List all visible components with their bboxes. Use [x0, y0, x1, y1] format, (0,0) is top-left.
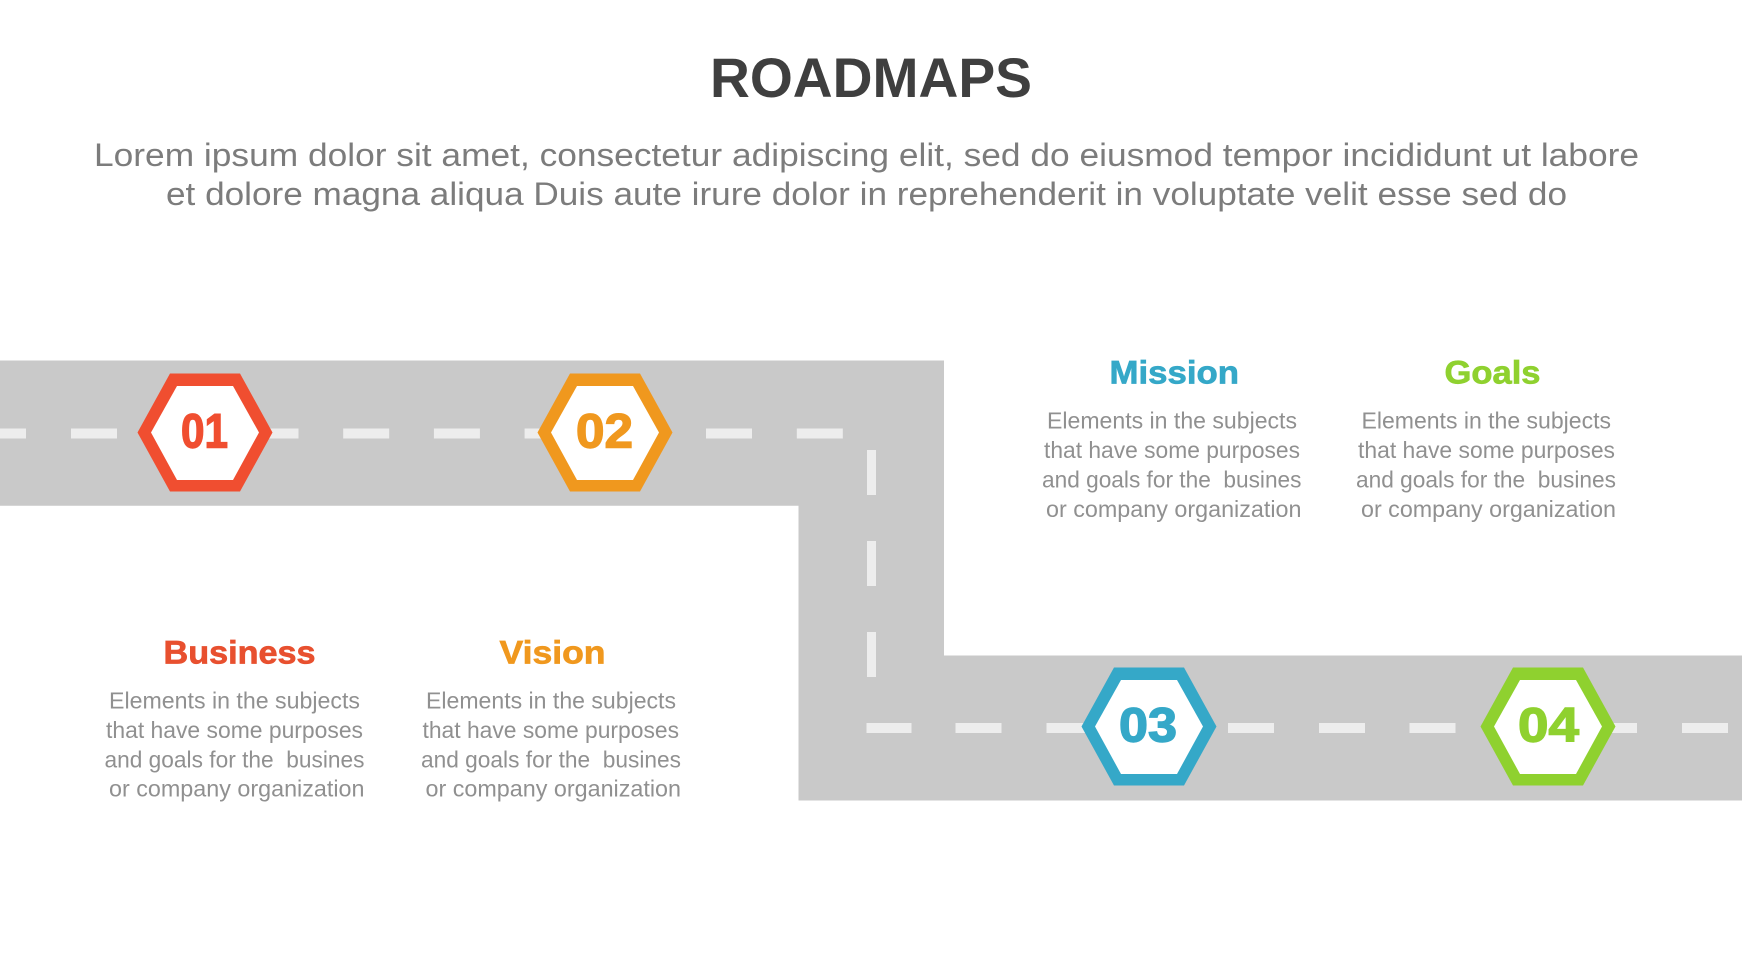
panel: Business	[104, 634, 364, 802]
heading: Vision: Vision	[500, 634, 606, 670]
description: Goals: and goals for the busines	[1356, 466, 1616, 492]
marker 01 hexagon	[138, 374, 272, 492]
description: Business: that have some purposes	[106, 717, 363, 743]
description: Goals: Elements in the subjects	[1362, 408, 1611, 434]
subtitle text block: et dolore magna aliqua Duis aute irure dolor in reprehenderit in voluptate velit esse sed do	[166, 176, 1567, 212]
road with lane markings	[0, 360, 1742, 800]
description: Vision: that have some purposes	[422, 717, 679, 743]
heading: Business: Business	[164, 634, 316, 670]
description: Business: and goals for the busines	[104, 746, 364, 772]
description: Vision: Elements in the subjects	[426, 688, 676, 714]
panel: Goals	[1356, 354, 1616, 522]
marker 04 hexagon	[1480, 668, 1616, 786]
marker 03 hexagon	[1082, 668, 1216, 786]
heading: Goals: Goals	[1444, 354, 1540, 390]
marker 04 hexagon: 04	[1518, 700, 1579, 752]
description: Mission	[1042, 408, 1302, 522]
marker 02 hexagon	[538, 374, 672, 492]
marker 02 hexagon: 02	[576, 406, 633, 458]
description: Business: Elements in the subjects	[109, 688, 360, 714]
description: Goals: or company organization	[1361, 496, 1616, 522]
subtitle text block	[94, 137, 1639, 212]
description: Vision	[421, 688, 681, 802]
heading: Mission: Mission	[1110, 354, 1239, 390]
title: ROADMAPS	[710, 47, 1032, 109]
description: Mission: Elements in the subjects	[1047, 408, 1297, 434]
description: Mission: and goals for the busines	[1042, 466, 1302, 492]
road surface	[0, 360, 1742, 800]
marker 03 hexagon: 03	[1119, 700, 1177, 752]
description: Vision: or company organization	[426, 776, 681, 802]
description: Mission: that have some purposes	[1044, 437, 1300, 463]
description: Mission: or company organization	[1046, 496, 1302, 522]
description: Business	[104, 688, 364, 802]
description: Goals: that have some purposes	[1358, 437, 1615, 463]
panel: Mission	[1042, 354, 1302, 522]
description: Vision: and goals for the busines	[421, 746, 681, 772]
description: Business: or company organization	[109, 776, 364, 802]
marker 01 hexagon: 01	[181, 406, 228, 458]
description: Goals	[1356, 408, 1616, 522]
subtitle text block: Lorem ipsum dolor sit amet, consectetur adipiscing elit, sed do eiusmod tempor incididunt ut labore	[94, 137, 1639, 173]
panel: Vision	[421, 634, 681, 802]
